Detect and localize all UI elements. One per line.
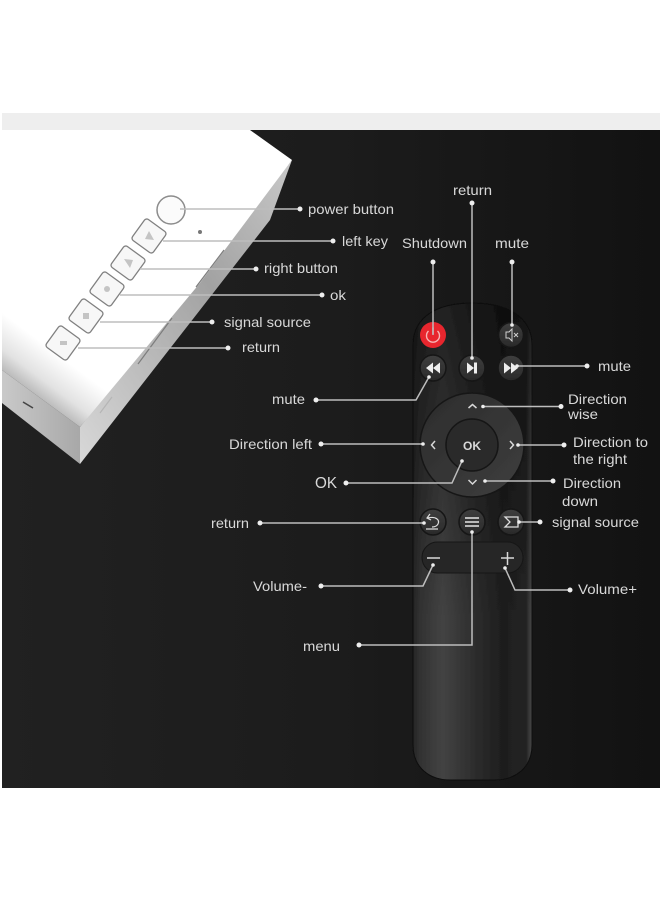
direction pad [420,393,524,497]
label: direction to the right [573,434,648,467]
remote labels [211,182,648,654]
label: mute right: mute [598,358,631,374]
top grey band [2,113,660,131]
leader: volume plus [503,566,572,592]
signal key on projector [68,298,104,334]
projector [2,130,292,464]
label: right button: right button [264,260,338,276]
leader: mute right [515,364,590,368]
leader: direction wise [481,404,564,409]
label: volume plus: Volume+ [578,581,637,597]
label: signal source right: signal source [552,514,639,530]
play pause key [459,355,485,381]
rewind key [420,355,446,381]
power key [420,322,446,348]
projector labels [224,201,394,355]
OK key [446,419,498,471]
projector right side face [80,160,292,464]
leader: menu [356,530,474,648]
leader: volume minus [318,563,435,588]
label: direction left: Direction left [229,436,312,452]
indicator light [198,230,202,234]
label: left key: left key [342,233,388,249]
label: direction down [562,475,621,509]
label: direction wise [567,391,627,422]
projector left side face [2,370,80,464]
leader: right button [140,266,258,272]
mute key [498,322,524,348]
leader: direction right [516,442,566,448]
leader: shutdown [430,260,436,335]
projector leaders [78,206,336,350]
menu key [459,509,485,535]
return key [420,509,446,535]
remote leaders [258,200,590,648]
leader: return left [258,520,426,526]
label: direction to the right: Direction to [573,434,648,450]
leader: mute left [314,375,431,402]
label: return top: return [453,182,492,198]
label: direction wise: Direction [568,391,627,407]
label: return left: return [211,515,249,531]
label: direction wise: wise [567,406,598,422]
label: mute top: mute [495,235,529,251]
OK key: OK [463,439,481,453]
key glyphs [60,231,154,345]
signal source key [498,509,524,535]
left key on projector [131,218,167,254]
remote body [413,303,532,780]
direction arrows [432,404,514,484]
right key on projector [110,245,146,281]
label: direction down: Direction [563,475,621,491]
label: menu: menu [303,638,340,654]
projector vents [23,250,224,413]
leader: direction down [483,478,556,484]
label: signal source: signal source [224,314,311,330]
leader: return [78,346,230,350]
label: direction to the right: the right [573,451,627,467]
dark panel [2,130,660,788]
leader: signal source [100,320,214,324]
leader: signal source right [517,520,542,524]
leader: ok [120,292,324,298]
leader: OK [344,459,464,486]
volume rocker [422,542,523,573]
projector top surface [2,130,292,427]
leader: mute top [510,260,514,327]
label: direction down: down [562,493,598,509]
label: OK: OK [315,475,337,492]
power button on projector [157,196,185,224]
remote control [413,303,532,780]
leader: return top [470,200,474,360]
remote upper shading [413,303,532,620]
ok key on projector [89,271,125,307]
label: ok: ok [330,287,347,303]
label: return: return [242,339,280,355]
label: shutdown: Shutdown [402,235,467,251]
leader: left key [163,238,336,244]
leader: power button [180,206,302,212]
label: volume minus: Volume- [253,578,307,594]
label: power button: power button [308,201,394,217]
leader: direction left [318,442,425,446]
fast forward key [498,355,524,381]
label: mute left: mute [272,391,305,407]
return key on projector [45,325,81,361]
